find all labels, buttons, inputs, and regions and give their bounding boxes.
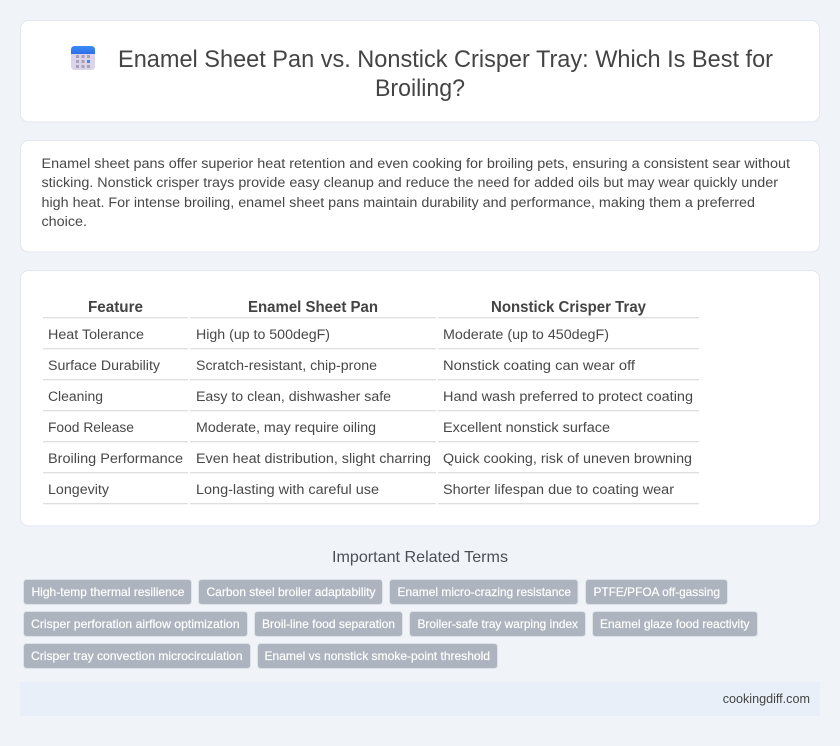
panel: summary paragraph — [20, 140, 820, 252]
row: broiling performance: Even heat distribution, slight charring — [196, 451, 431, 467]
summary text: Enamel sheet pans offer superior heat retention and even cooking for broiling pets, ensuring a consistent sear without — [42, 156, 790, 172]
table header: Enamel Sheet Pan — [248, 299, 378, 316]
row: food release: Moderate, may require oiling — [196, 420, 376, 436]
row: surface durability — [48, 358, 635, 374]
footer bar: cookingdiff.com — [723, 691, 810, 706]
related term tags: Enamel micro-crazing resistance — [398, 585, 571, 599]
row: food release: Food Release — [48, 420, 134, 436]
row: surface durability: Nonstick coating can wear off — [443, 358, 635, 374]
heading: important related terms: Important Related Terms — [332, 549, 508, 566]
related term tags: High-temp thermal resilience — [32, 585, 185, 599]
row: surface durability: Surface Durability — [48, 358, 161, 374]
table header: Feature — [88, 299, 143, 316]
summary text: sticking. Nonstick crisper trays provide easy cleanup and reduce the need for added oils but may wear quickly under — [42, 175, 778, 191]
summary text: high heat. For intense broiling, enamel sheet pans maintain durability and performance, making them a preferred — [42, 195, 755, 211]
related term tags: Carbon steel broiler adaptability — [206, 585, 376, 599]
footer bar — [20, 682, 820, 716]
row: longevity: Longevity — [48, 482, 110, 498]
row: longevity: Long-lasting with careful use — [196, 482, 379, 498]
panel: comparison table — [20, 270, 820, 526]
icon: calendar — [71, 46, 95, 70]
row: longevity: Shorter lifespan due to coating wear — [443, 482, 674, 498]
row: heat tolerance: Moderate (up to 450degF) — [443, 327, 609, 343]
row: longevity — [48, 482, 674, 498]
title: Broiling? — [375, 75, 465, 102]
row: cleaning — [48, 389, 693, 405]
row: cleaning: Easy to clean, dishwasher safe — [196, 389, 391, 405]
row: heat tolerance: Heat Tolerance — [48, 327, 144, 343]
related term tags: Broil-line food separation — [262, 617, 395, 631]
row: broiling performance: Quick cooking, risk of uneven browning — [443, 451, 692, 467]
row: heat tolerance: High (up to 500degF) — [196, 327, 330, 343]
summary text: choice. — [42, 214, 87, 230]
row: cleaning: Hand wash preferred to protect coating — [443, 389, 693, 405]
row: food release: Excellent nonstick surface — [443, 420, 610, 436]
table header: Nonstick Crisper Tray — [491, 299, 646, 316]
related term tags: Enamel vs nonstick smoke-point threshold — [264, 649, 490, 663]
row: surface durability: Scratch-resistant, chip-prone — [196, 358, 377, 374]
title: Enamel Sheet Pan vs. Nonstick Crisper Tray: Which Is Best for — [118, 46, 773, 73]
related term tags — [24, 580, 758, 668]
row: cleaning: Cleaning — [48, 389, 103, 405]
row: heat tolerance — [48, 327, 609, 343]
related term tags: Crisper tray convection microcirculation — [31, 649, 243, 663]
row: broiling performance — [48, 451, 692, 467]
title — [118, 46, 773, 102]
summary text — [42, 156, 790, 230]
related term tags: Crisper perforation airflow optimization — [31, 617, 240, 631]
related term tags: PTFE/PFOA off-gassing — [594, 585, 720, 599]
table header — [88, 299, 646, 316]
related term tags: Enamel glaze food reactivity — [600, 617, 750, 631]
panel: title header — [20, 20, 820, 122]
row: food release — [48, 420, 610, 436]
row: broiling performance: Broiling Performance — [48, 451, 183, 467]
related term tags: Broiler-safe tray warping index — [418, 617, 578, 631]
